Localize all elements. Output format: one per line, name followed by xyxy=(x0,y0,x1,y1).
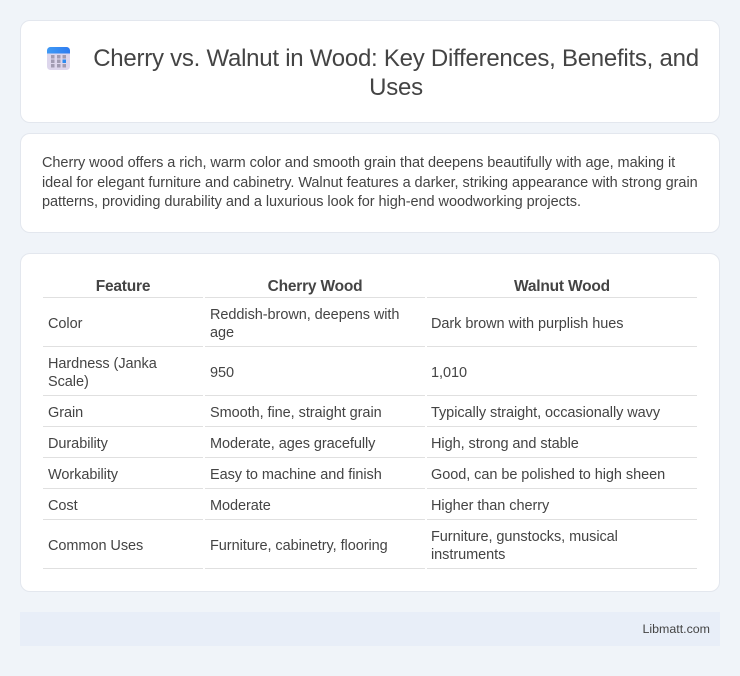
comparison table: Furniture, gunstocks, musical xyxy=(431,529,618,545)
comparison table: Moderate, ages gracefully xyxy=(210,436,375,452)
footer bar xyxy=(20,612,720,646)
row: Cost: Cost xyxy=(48,498,78,514)
comparison table: Good, can be polished to high sheen xyxy=(431,467,665,483)
comparison table: High, strong and stable xyxy=(431,436,579,452)
comparison table: 950 xyxy=(210,365,234,381)
comparison table: instruments xyxy=(431,547,505,563)
row: Hardness: Scale) xyxy=(48,374,89,390)
title: Cherry vs. Walnut in Wood: Key Differences, Benefits, and Uses xyxy=(93,45,699,101)
intro paragraph: ideal for elegant furniture and cabinetry. Walnut features a darker, striking appearance with strong grain xyxy=(42,175,698,191)
comparison table: Furniture, cabinetry, flooring xyxy=(210,538,388,554)
header card xyxy=(20,20,720,123)
comparison table: Moderate xyxy=(210,498,271,514)
row: Grain: Grain xyxy=(48,405,83,421)
comparison table: Easy to machine and finish xyxy=(210,467,382,483)
row: Hardness xyxy=(48,356,157,390)
comparison table: Reddish-brown, deepens with xyxy=(210,307,399,323)
intro paragraph xyxy=(42,155,698,210)
footer text: Libmatt.com xyxy=(643,622,710,636)
comparison table: Higher than cherry xyxy=(431,498,549,514)
comparison table: age xyxy=(210,325,234,341)
intro text card xyxy=(20,133,720,233)
intro paragraph: patterns, providing durability and a luxurious look for high-end woodworking projects. xyxy=(42,194,581,210)
comparison table: Dark brown with purplish hues xyxy=(431,316,624,332)
row: Workability: Workability xyxy=(48,467,118,483)
icon: calendar xyxy=(47,47,70,70)
header: Walnut Wood: Walnut Wood xyxy=(514,278,610,295)
comparison table: 1,010 xyxy=(431,365,467,381)
header: Cherry Wood: Cherry Wood xyxy=(268,278,362,295)
row: Durability: Durability xyxy=(48,436,108,452)
comparison table card xyxy=(20,253,720,592)
intro paragraph: Cherry wood offers a rich, warm color and smooth grain that deepens beautifully with age, making it xyxy=(42,155,675,171)
comparison table: Typically straight, occasionally wavy xyxy=(431,405,660,421)
row: Hardness: Hardness (Janka xyxy=(48,356,157,372)
header: Feature: Feature xyxy=(96,278,150,295)
row: Common Uses: Common Uses xyxy=(48,538,143,554)
comparison table: Smooth, fine, straight grain xyxy=(210,405,382,421)
row: Color: Color xyxy=(48,316,82,332)
